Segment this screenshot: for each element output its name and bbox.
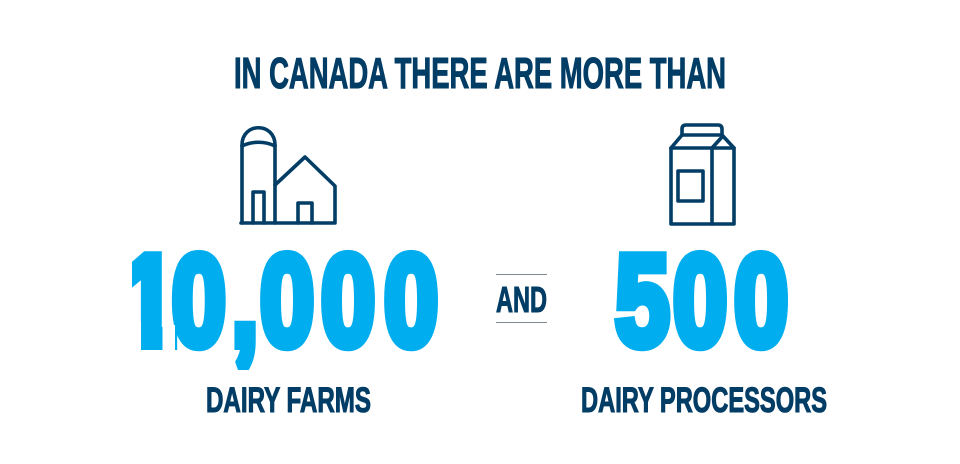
number: 10,000: 10,000 xyxy=(122,230,438,373)
label: dairy processors: DAIRY PROCESSORS xyxy=(581,381,827,420)
icon: milk carton xyxy=(671,125,734,224)
label: dairy farms: DAIRY FARMS xyxy=(206,381,371,420)
icon: silo and barn xyxy=(241,128,335,223)
divider label: and: AND xyxy=(496,279,547,320)
divider label: and xyxy=(496,274,547,322)
number: 500: 500 xyxy=(615,230,788,373)
